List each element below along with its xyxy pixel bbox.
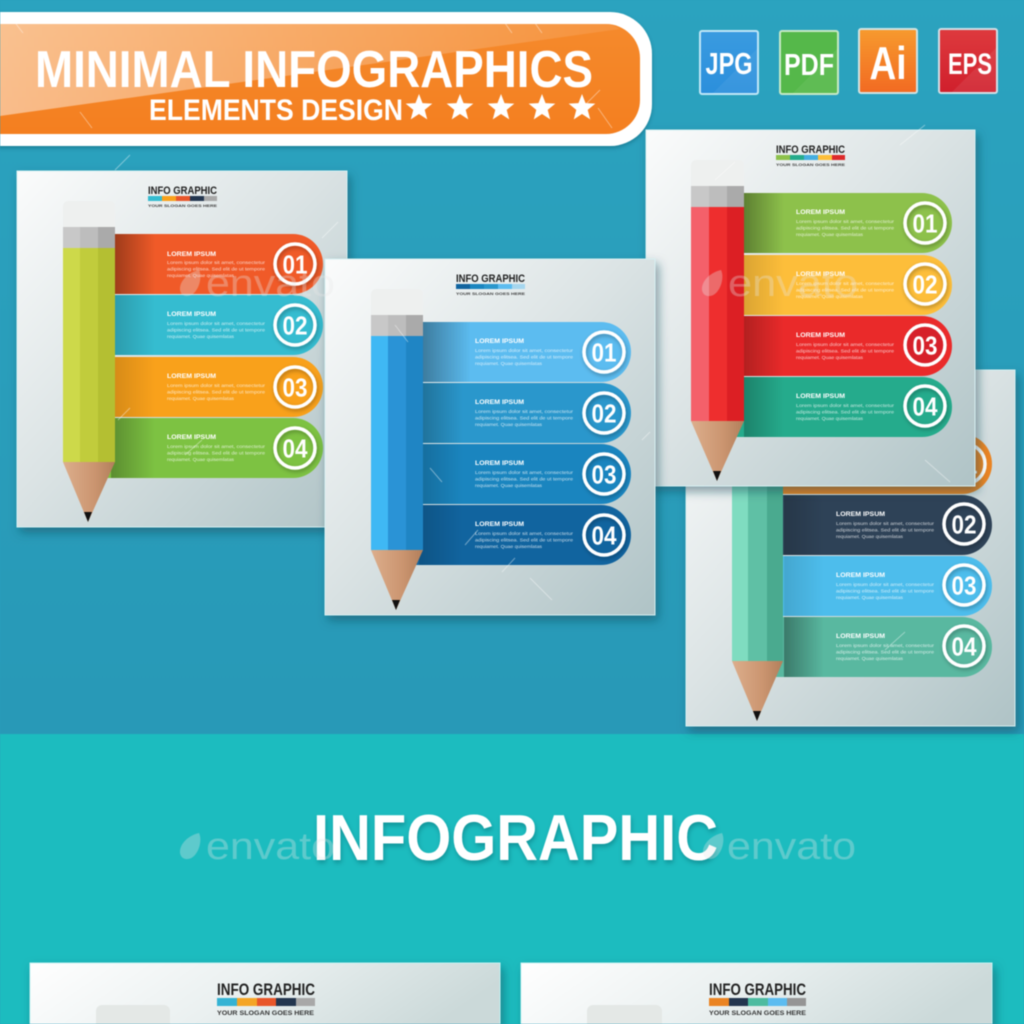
badge: JPG: JPG — [706, 46, 752, 81]
band 03 amber: LOREM IPSUM — [167, 374, 216, 380]
banner orange fill — [0, 24, 640, 134]
header banner — [0, 12, 652, 146]
band 04 dark blue — [389, 505, 631, 565]
watermark: upper left: envato — [206, 263, 335, 305]
band 04 sea green — [756, 617, 992, 677]
watermark: lower right: envato — [727, 826, 856, 868]
band 04 teal: adipiscing elitsea. Sed elit de ut tempore — [796, 410, 895, 414]
band 02 blue: requiamet. Quae quisemlatas — [475, 422, 543, 427]
card header: YOUR SLOGAN GOES HERE — [776, 162, 845, 167]
panel: green pencil card — [686, 370, 1015, 726]
card header: INFO GRAPHIC — [456, 273, 525, 285]
panel: red pencil card — [646, 130, 975, 486]
band 01 light blue: Lorem ipsum dolor sit amet, consectetur — [475, 348, 574, 353]
pencil: yellow-green — [63, 201, 115, 522]
band 01 orange-red: Lorem ipsum dolor sit amet, consectetur — [167, 260, 266, 265]
badge: Ai: Ai — [870, 37, 906, 89]
card header: INFO GRAPHIC — [709, 980, 806, 999]
band 03 red: adipiscing elitsea. Sed elit de ut tempore — [796, 348, 895, 354]
band 03 mid blue: Lorem ipsum dolor sit amet, consectetur — [475, 470, 574, 475]
band 01 orange-red: requiamet. Quae quisemlatas — [167, 273, 235, 278]
card header: INFO GRAPHIC — [217, 980, 315, 999]
band 03 mid blue: requiamet. Quae quisemlatas — [475, 483, 543, 488]
card header: YOUR SLOGAN GOES HERE — [148, 203, 217, 208]
background: lower teal section — [0, 734, 1024, 1024]
banner subtitle: ELEMENTS DESIGN — [149, 94, 403, 127]
band 02 navy: 02 — [952, 510, 976, 540]
band 01 green: requiamet. Quae quisemlatas — [796, 232, 864, 237]
panel: lower right preview card — [521, 963, 992, 1024]
band 02 navy — [756, 495, 992, 555]
band 04 dark blue: adipiscing elitsea. Sed elit de ut tempore — [475, 538, 574, 542]
band 01 orange — [756, 434, 992, 494]
band 04 dark blue: 04 — [592, 520, 617, 550]
watermark: lower left: envato — [206, 826, 335, 868]
band 04 sea green: 04 — [952, 632, 977, 662]
band 03 amber: adipiscing elitsea. Sed elit de ut tempore — [167, 390, 266, 394]
badge: PDF — [780, 31, 838, 94]
band 02 cyan: adipiscing elitsea. Sed elit de ut tempore — [167, 328, 266, 332]
banner title: MINIMAL INFOGRAPHICS — [35, 41, 593, 99]
band 02 cyan: Lorem ipsum dolor sit amet, consectetur — [167, 321, 266, 326]
band 03 amber: 03 — [282, 372, 308, 402]
band 03 sky: adipiscing elitsea. Sed elit de ut tempore — [836, 588, 935, 594]
band 02 cyan — [81, 295, 323, 355]
card header: YOUR SLOGAN GOES HERE — [456, 291, 525, 296]
band 02 yellow: 02 — [912, 270, 938, 300]
band 03 amber: Lorem ipsum dolor sit amet, consectetur — [167, 383, 266, 388]
band 04 sea green: LOREM IPSUM — [836, 634, 885, 640]
band 02 yellow: LOREM IPSUM — [796, 272, 845, 278]
card header — [709, 980, 806, 1017]
badge: Ai — [859, 29, 917, 93]
pencil: green — [732, 447, 783, 721]
band 02 navy: Lorem ipsum dolor sit amet, consectetur — [836, 521, 935, 526]
band 03 red: requiamet. Quae quisemlatas — [796, 355, 864, 360]
panel: lower left preview card — [30, 963, 500, 1024]
section heading: INFOGRAPHIC — [313, 801, 718, 874]
band 01 orange-red: 01 — [282, 250, 308, 280]
band 01 light blue — [389, 322, 631, 382]
band 02 cyan: requiamet. Quae quisemlatas — [167, 334, 235, 339]
banner gloss — [0, 24, 620, 116]
card header: INFO GRAPHIC — [148, 185, 217, 197]
band 03 amber: requiamet. Quae quisemlatas — [167, 396, 235, 401]
pencil: red — [691, 160, 744, 481]
band 03 mid blue — [389, 444, 631, 504]
band 03 sky: LOREM IPSUM — [836, 573, 885, 579]
rating stars — [406, 94, 595, 119]
band 04 teal: requiamet. Quae quisemlatas — [796, 416, 864, 421]
band 02 navy: LOREM IPSUM — [836, 512, 885, 518]
band 03 red — [710, 316, 952, 376]
band 01 orange: 01 — [952, 450, 978, 480]
band 02 blue: 02 — [592, 398, 616, 428]
card header: INFO GRAPHIC — [776, 144, 845, 156]
band 02 blue: adipiscing elitsea. Sed elit de ut tempore — [475, 416, 574, 420]
card header — [217, 980, 315, 1017]
band 04 dark blue: Lorem ipsum dolor sit amet, consectetur — [475, 531, 574, 536]
band 02 cyan: LOREM IPSUM — [167, 312, 216, 318]
band 04 sea green: requiamet. Quae quisemlatas — [836, 656, 904, 661]
band 02 yellow: adipiscing elitsea. Sed elit de ut tempore — [796, 288, 895, 292]
band 04 dark blue: requiamet. Quae quisemlatas — [475, 544, 543, 549]
band 01 light blue: adipiscing elitsea. Sed elit de ut tempore — [475, 354, 574, 360]
band 01 green: adipiscing elitsea. Sed elit de ut tempore — [796, 226, 895, 230]
band 03 mid blue: adipiscing elitsea. Sed elit de ut tempore — [475, 476, 574, 482]
band 02 navy: requiamet. Quae quisemlatas — [836, 534, 904, 539]
format badges — [700, 29, 997, 94]
band 02 yellow: requiamet. Quae quisemlatas — [796, 294, 864, 299]
band 03 sky: Lorem ipsum dolor sit amet, consectetur — [836, 582, 935, 587]
band 04 green: requiamet. Quae quisemlatas — [167, 457, 235, 462]
background: upper blue section — [0, 0, 1024, 734]
panel: yellow-green pencil card — [17, 171, 347, 527]
band 01 orange-red — [81, 234, 323, 294]
band 02 yellow — [710, 255, 952, 315]
band 04 sea green: Lorem ipsum dolor sit amet, consectetur — [836, 643, 935, 648]
band 03 red: Lorem ipsum dolor sit amet, consectetur — [796, 342, 895, 347]
band 01 orange-red: adipiscing elitsea. Sed elit de ut tempore — [167, 266, 266, 272]
badge: PDF: PDF — [784, 47, 834, 82]
badge: EPS: EPS — [948, 48, 992, 81]
band 04 green: LOREM IPSUM — [167, 435, 216, 441]
panel: blue pencil card — [325, 259, 655, 615]
band 03 sky: requiamet. Quae quisemlatas — [836, 595, 904, 600]
band 04 teal — [710, 377, 952, 437]
banner white outline — [0, 12, 652, 146]
band 03 sky: 03 — [952, 570, 976, 600]
band 01 green: Lorem ipsum dolor sit amet, consectetur — [796, 219, 895, 224]
band 01 light blue: 01 — [592, 338, 616, 368]
band 03 mid blue: LOREM IPSUM — [475, 461, 524, 467]
card header: YOUR SLOGAN GOES HERE — [709, 1011, 806, 1017]
band 03 red: LOREM IPSUM — [796, 333, 845, 339]
card header: YOUR SLOGAN GOES HERE — [217, 1011, 314, 1017]
band 02 blue: Lorem ipsum dolor sit amet, consectetur — [475, 409, 574, 414]
card header — [776, 144, 845, 167]
band 04 green: adipiscing elitsea. Sed elit de ut tempore — [167, 450, 266, 456]
band 02 blue — [389, 383, 631, 443]
band 02 blue: LOREM IPSUM — [475, 400, 524, 406]
card header — [456, 273, 525, 296]
band 04 sea green: adipiscing elitsea. Sed elit de ut tempore — [836, 650, 935, 654]
band 01 light blue: requiamet. Quae quisemlatas — [475, 361, 543, 366]
watermark: upper right: envato — [728, 263, 858, 305]
band 04 green: Lorem ipsum dolor sit amet, consectetur — [167, 444, 266, 449]
band 03 sky — [756, 556, 992, 616]
band 04 teal: 04 — [912, 392, 938, 422]
band 01 green: LOREM IPSUM — [796, 210, 845, 216]
eraser — [96, 1005, 170, 1024]
band 01 orange-red: LOREM IPSUM — [167, 252, 216, 258]
band 02 yellow: Lorem ipsum dolor sit amet, consectetur — [796, 281, 895, 286]
band 04 green: 04 — [282, 434, 308, 464]
pencil: blue — [371, 289, 423, 610]
band 04 dark blue: LOREM IPSUM — [475, 522, 524, 528]
badge: JPG — [700, 31, 758, 94]
band 03 red: 03 — [912, 330, 938, 360]
band 04 teal: LOREM IPSUM — [796, 394, 845, 400]
band 01 green: 01 — [912, 208, 938, 238]
band 02 cyan: 02 — [282, 310, 308, 340]
card header — [148, 185, 217, 208]
band 03 mid blue: 03 — [592, 460, 616, 490]
band 03 amber — [81, 357, 323, 417]
band 02 navy: adipiscing elitsea. Sed elit de ut tempore — [836, 528, 935, 532]
eraser — [587, 1005, 662, 1024]
band 01 light blue: LOREM IPSUM — [475, 339, 524, 345]
badge: EPS — [939, 29, 997, 93]
band 04 teal: Lorem ipsum dolor sit amet, consectetur — [796, 403, 895, 408]
band 04 green — [81, 418, 323, 478]
band 01 green — [710, 193, 952, 253]
